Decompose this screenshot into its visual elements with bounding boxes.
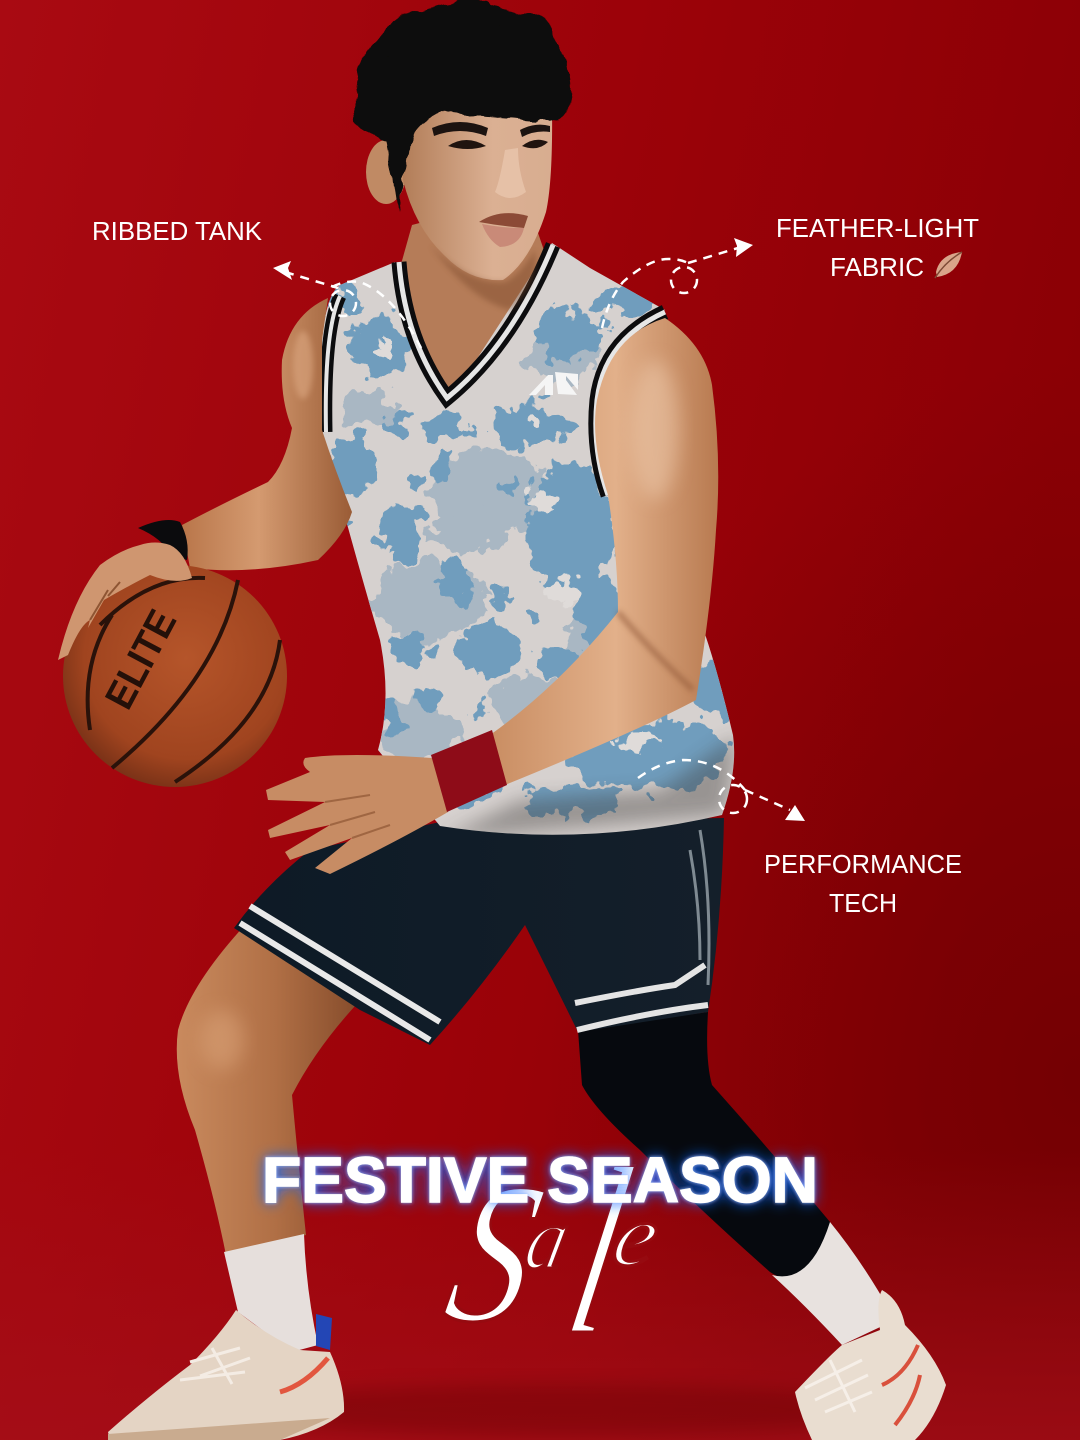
basketball [63, 565, 287, 787]
callout: performance tech [638, 760, 962, 918]
neck [398, 195, 548, 398]
arrowhead: performance tech [785, 805, 805, 821]
callout: ribbed tank [92, 216, 423, 352]
label: ribbed tank: RIBBED TANK [92, 216, 263, 246]
right arm [490, 318, 718, 785]
ear [366, 140, 406, 204]
right shoe [795, 1290, 946, 1440]
armhole trim left [326, 296, 340, 432]
chest logo [529, 372, 578, 395]
left hand [58, 542, 192, 660]
label: performance: PERFORMANCE [764, 849, 962, 879]
left arm [182, 298, 352, 570]
wristband [431, 730, 507, 812]
script word: Sale: a [517, 1191, 578, 1288]
callout: feather-light fabric [602, 213, 979, 328]
ball brand: ELITE [97, 603, 185, 716]
right hand [266, 755, 448, 874]
left shoe [108, 1310, 344, 1440]
label: fabric: FABRIC [830, 252, 924, 282]
armhole trim right [596, 312, 665, 495]
shorts [234, 818, 724, 1045]
icon: feather [935, 252, 962, 278]
arrow: ribbed tank [285, 272, 423, 352]
right sock [772, 1222, 895, 1345]
arrowhead: ribbed tank [273, 261, 292, 280]
floor shadow [220, 1384, 900, 1436]
label: tech: TECH [829, 888, 897, 918]
camo pattern [322, 243, 734, 835]
wristwatch [138, 520, 188, 560]
arrow: feather-light [602, 248, 738, 328]
label: feather-light: FEATHER-LIGHT [776, 213, 979, 243]
collar trim [399, 245, 553, 398]
lips [479, 213, 528, 247]
left leg [177, 925, 375, 1255]
script word: Sale: l [552, 1119, 648, 1384]
tank top [322, 242, 734, 835]
script word: Sale: e [605, 1188, 668, 1285]
right leg tights [578, 1012, 830, 1283]
title: festive season: FESTIVE SEASON [262, 1144, 818, 1216]
arrowhead: feather-light [734, 238, 753, 257]
eyes and brows [432, 122, 550, 149]
left sock [224, 1234, 318, 1352]
script word: Sale: S [431, 1142, 558, 1364]
nose [495, 148, 526, 198]
arrow: performance tech [638, 760, 790, 813]
hair [355, 0, 570, 212]
chin shadow [430, 245, 536, 310]
face [403, 105, 552, 280]
head [366, 105, 552, 310]
hem shadow [440, 735, 738, 840]
